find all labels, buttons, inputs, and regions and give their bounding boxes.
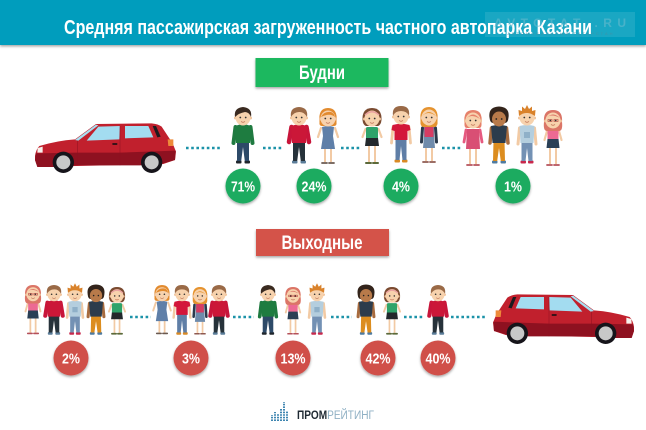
person: man in green — [260, 285, 276, 335]
logo wordmark: ПРОМРЕЙТИНГ — [297, 409, 375, 422]
car: weekend — [493, 294, 634, 344]
logo — [272, 402, 375, 422]
people: weekdays — [234, 105, 562, 165]
logo icon: bars — [272, 402, 287, 421]
person: boy with spiky hair — [67, 283, 83, 335]
weekdays label: Будни — [299, 63, 345, 84]
badge 2%: 2% — [62, 350, 80, 368]
watermark: AVTOTAT .RU — [494, 16, 626, 30]
person: man in green — [234, 107, 252, 164]
person: girl in navy cardigan — [192, 287, 208, 334]
badge 4% — [384, 168, 418, 204]
person: man in red — [429, 285, 447, 335]
person: girl in navy cardigan — [420, 107, 438, 162]
badge 71% — [226, 168, 260, 204]
person: girl with glasses — [544, 110, 562, 165]
person: girl in blue dress — [318, 108, 338, 163]
person: boy in red shirt — [174, 285, 190, 335]
person: curly-haired boy — [357, 285, 375, 335]
watermark: АВТОМОБИЛЬНЫЙ ТАТАРСТАН — [508, 31, 613, 36]
dotted connectors: weekdays — [186, 147, 462, 149]
person: boy with spiky hair — [518, 105, 536, 164]
person: curly-haired boy — [87, 285, 105, 335]
badge 2% — [54, 340, 88, 376]
person: man in red — [210, 285, 228, 335]
person: girl with glasses — [285, 287, 301, 334]
badge 40%: 40% — [426, 350, 450, 368]
badge 42%: 42% — [366, 350, 390, 368]
person: man in red — [289, 107, 309, 164]
person: girl in blue dress — [153, 285, 171, 333]
person: girl in green top — [109, 287, 125, 334]
person: boy in red shirt — [392, 106, 410, 162]
car: weekdays — [35, 123, 176, 173]
person: girl in green top — [362, 108, 382, 163]
badge 24% — [296, 168, 332, 204]
badge 1% — [496, 168, 530, 204]
person: girl in pink — [464, 110, 482, 165]
badge 13% — [276, 340, 310, 376]
weekend percentages — [54, 340, 456, 376]
weekend label: Выходные — [282, 233, 362, 254]
person: man in red — [45, 285, 63, 335]
person: curly-haired boy — [489, 106, 509, 164]
person: girl with glasses — [25, 285, 41, 333]
badge 3% — [174, 340, 208, 376]
badge 40% — [420, 340, 456, 376]
people: weekend — [25, 283, 447, 335]
badge 42% — [360, 340, 396, 376]
person: boy with spiky hair — [309, 283, 325, 335]
badge 3%: 3% — [182, 350, 200, 368]
badge 71%: 71% — [231, 178, 255, 196]
header bar — [0, 0, 646, 45]
dotted connectors: weekend — [130, 316, 487, 318]
watermark — [485, 12, 635, 37]
badge 13%: 13% — [280, 350, 306, 368]
badge 4%: 4% — [392, 178, 410, 196]
badge 1%: 1% — [504, 178, 522, 196]
badge 24%: 24% — [302, 178, 326, 196]
weekdays label — [256, 58, 388, 87]
person: girl in green top — [384, 287, 400, 334]
weekday percentages — [226, 168, 530, 204]
weekend label — [256, 229, 389, 256]
